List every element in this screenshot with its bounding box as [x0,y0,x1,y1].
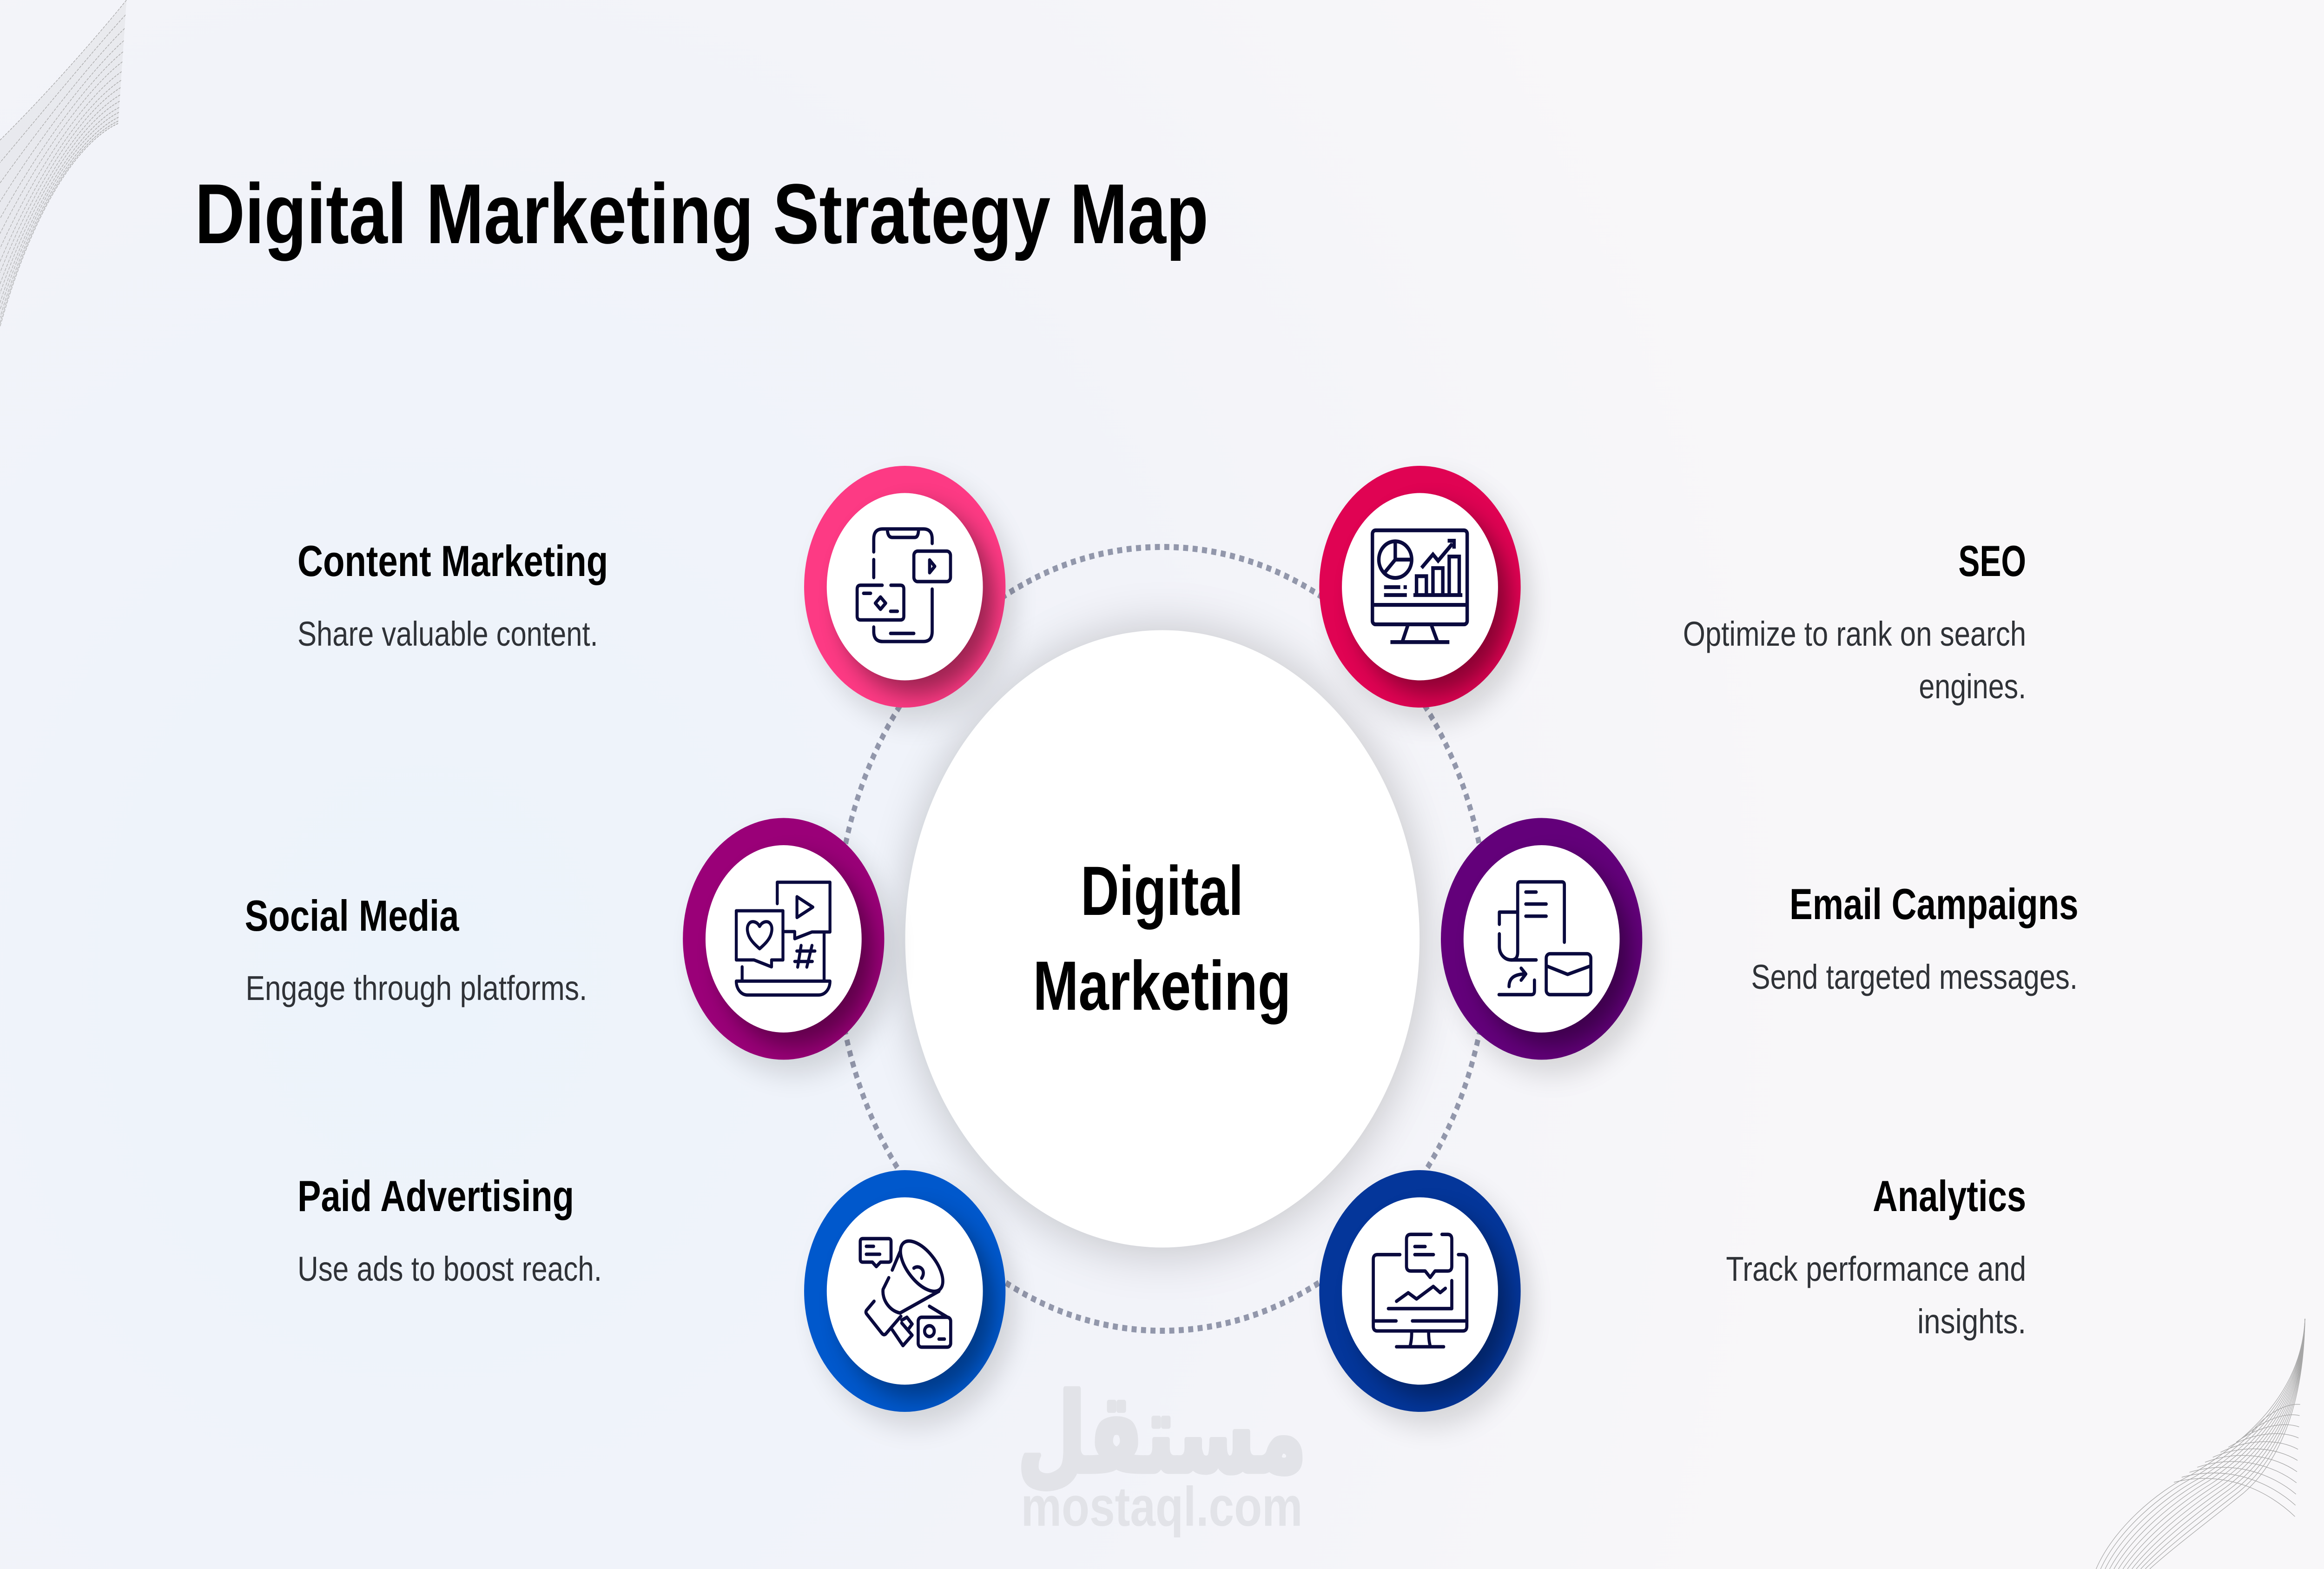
node: social media [683,818,894,1074]
text: SEO [1683,537,2026,706]
watermark: مستقل [1017,1371,1307,1497]
text: analytics: insights. [1917,1303,2026,1341]
title: Digital Marketing Strategy Map [195,166,1208,261]
text: analytics: Analytics [1873,1172,2026,1221]
text: content marketing: Share valuable content. [297,615,598,653]
text: content marketing: Content Marketing [297,537,608,586]
text: email campaigns [1751,880,2079,996]
text: content marketing [297,537,608,653]
decorative wave: bottom-right corner [2096,1319,2305,1569]
text: analytics: Track performance and [1726,1250,2026,1288]
node: email campaigns [1441,818,1652,1074]
icon: megaphone [860,1233,951,1347]
node: analytics [1319,1170,1531,1426]
icon: analytics monitor [1373,1234,1467,1347]
node: content marketing [804,466,1016,722]
text: SEO: SEO [1958,537,2026,586]
text: paid advertising [297,1172,602,1288]
center label [1033,852,1291,1025]
dotted connector ring [836,547,1489,1331]
text: paid advertising: Use ads to boost reach. [297,1250,602,1288]
text: analytics [1726,1172,2026,1341]
icon: dashboard monitor [1373,530,1467,642]
text: paid advertising: Paid Advertising [297,1172,574,1221]
text: social media: Engage through platforms. [245,969,587,1007]
text: email campaigns: Send targeted messages. [1751,958,2078,996]
text: social media [245,892,587,1007]
text: SEO: engines. [1919,668,2026,706]
icon: document and envelope [1499,882,1591,994]
center label: Marketing [1033,947,1291,1025]
node: SEO [1319,466,1531,722]
text: SEO: Optimize to rank on search [1683,615,2026,653]
text: email campaigns: Email Campaigns [1789,880,2079,929]
text: social media: Social Media [245,892,459,940]
icon: phone with media cards [857,529,951,642]
node: paid advertising [804,1170,1016,1426]
center label: Digital [1081,852,1243,930]
icon: laptop with social bubbles [736,882,830,995]
watermark: mostaql.com [1021,1476,1303,1538]
decorative wave: top-left corner [0,0,126,327]
center hub [905,630,1422,1251]
